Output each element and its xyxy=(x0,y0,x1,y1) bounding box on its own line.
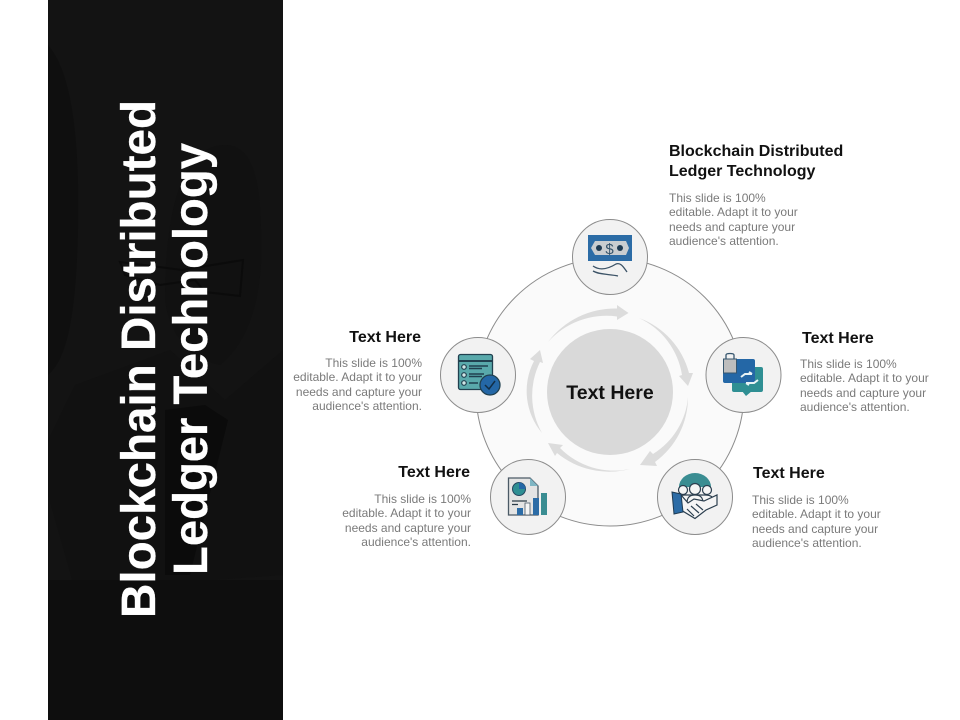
text block: lower left description xyxy=(342,492,471,549)
title xyxy=(113,100,218,618)
title: Ledger Technology xyxy=(165,143,218,575)
text block: lower left description: editable. Adapt it to your xyxy=(342,506,471,520)
text block: lower left description: This slide is 100% xyxy=(374,492,471,506)
icon: bag and chat bubbles xyxy=(723,354,763,396)
cycle arrows xyxy=(527,305,693,472)
text block: lower right description: editable. Adapt it to your xyxy=(752,507,881,521)
text block: left description: audience's attention. xyxy=(312,399,422,413)
node: partnership icon xyxy=(658,460,732,534)
node: money icon xyxy=(572,220,648,294)
center label: Text Here xyxy=(566,382,654,404)
text block: lower right description xyxy=(752,492,881,550)
icon: document with charts xyxy=(508,478,547,515)
text block: right description xyxy=(800,356,929,414)
text block: top description: This slide is 100% xyxy=(669,190,766,204)
large ring background xyxy=(476,258,744,526)
text block: lower right description: This slide is 100% xyxy=(752,492,849,506)
center circle xyxy=(547,329,673,455)
text block: right description: needs and capture your xyxy=(800,386,926,400)
text block: top heading: Blockchain Distributed xyxy=(669,143,843,160)
panel: dark photo sidebar xyxy=(48,0,283,720)
text block: top heading xyxy=(669,143,843,180)
text block: top heading: Ledger Technology xyxy=(669,162,815,180)
icon: banknote and hand: $ xyxy=(605,241,614,258)
text block: lower left description: audience's attention. xyxy=(361,535,471,549)
text block: top description: audience's attention. xyxy=(669,234,779,248)
text block: left description xyxy=(293,356,422,413)
text block: top description: editable. Adapt it to your xyxy=(669,205,798,219)
text block: right heading: Text Here xyxy=(802,330,874,347)
text block: top description: needs and capture your xyxy=(669,220,795,234)
text block: top description xyxy=(669,190,798,248)
title: Blockchain Distributed xyxy=(113,100,166,618)
node: shopping exchange icon xyxy=(706,338,781,412)
text block: lower right heading: Text Here xyxy=(753,465,825,482)
text block: left description: needs and capture your xyxy=(296,384,422,398)
text block: left description: editable. Adapt it to your xyxy=(293,370,422,384)
text block: lower left description: needs and capture your xyxy=(345,520,471,534)
icon: checklist with badge xyxy=(458,354,500,395)
icon: team and handshake xyxy=(672,473,717,518)
node: report icon xyxy=(490,460,566,534)
text block: lower right description: audience's attention. xyxy=(752,536,862,550)
node: checklist icon xyxy=(440,338,516,412)
text block: right description: This slide is 100% xyxy=(800,356,897,370)
text block: right description: editable. Adapt it to your xyxy=(800,371,929,385)
text block: right description: audience's attention. xyxy=(800,400,910,414)
text block: left heading: Text Here xyxy=(349,329,421,346)
text block: lower right description: needs and capture your xyxy=(752,522,878,536)
text block: lower left heading: Text Here xyxy=(398,464,470,481)
text block: left description: This slide is 100% xyxy=(325,356,422,370)
